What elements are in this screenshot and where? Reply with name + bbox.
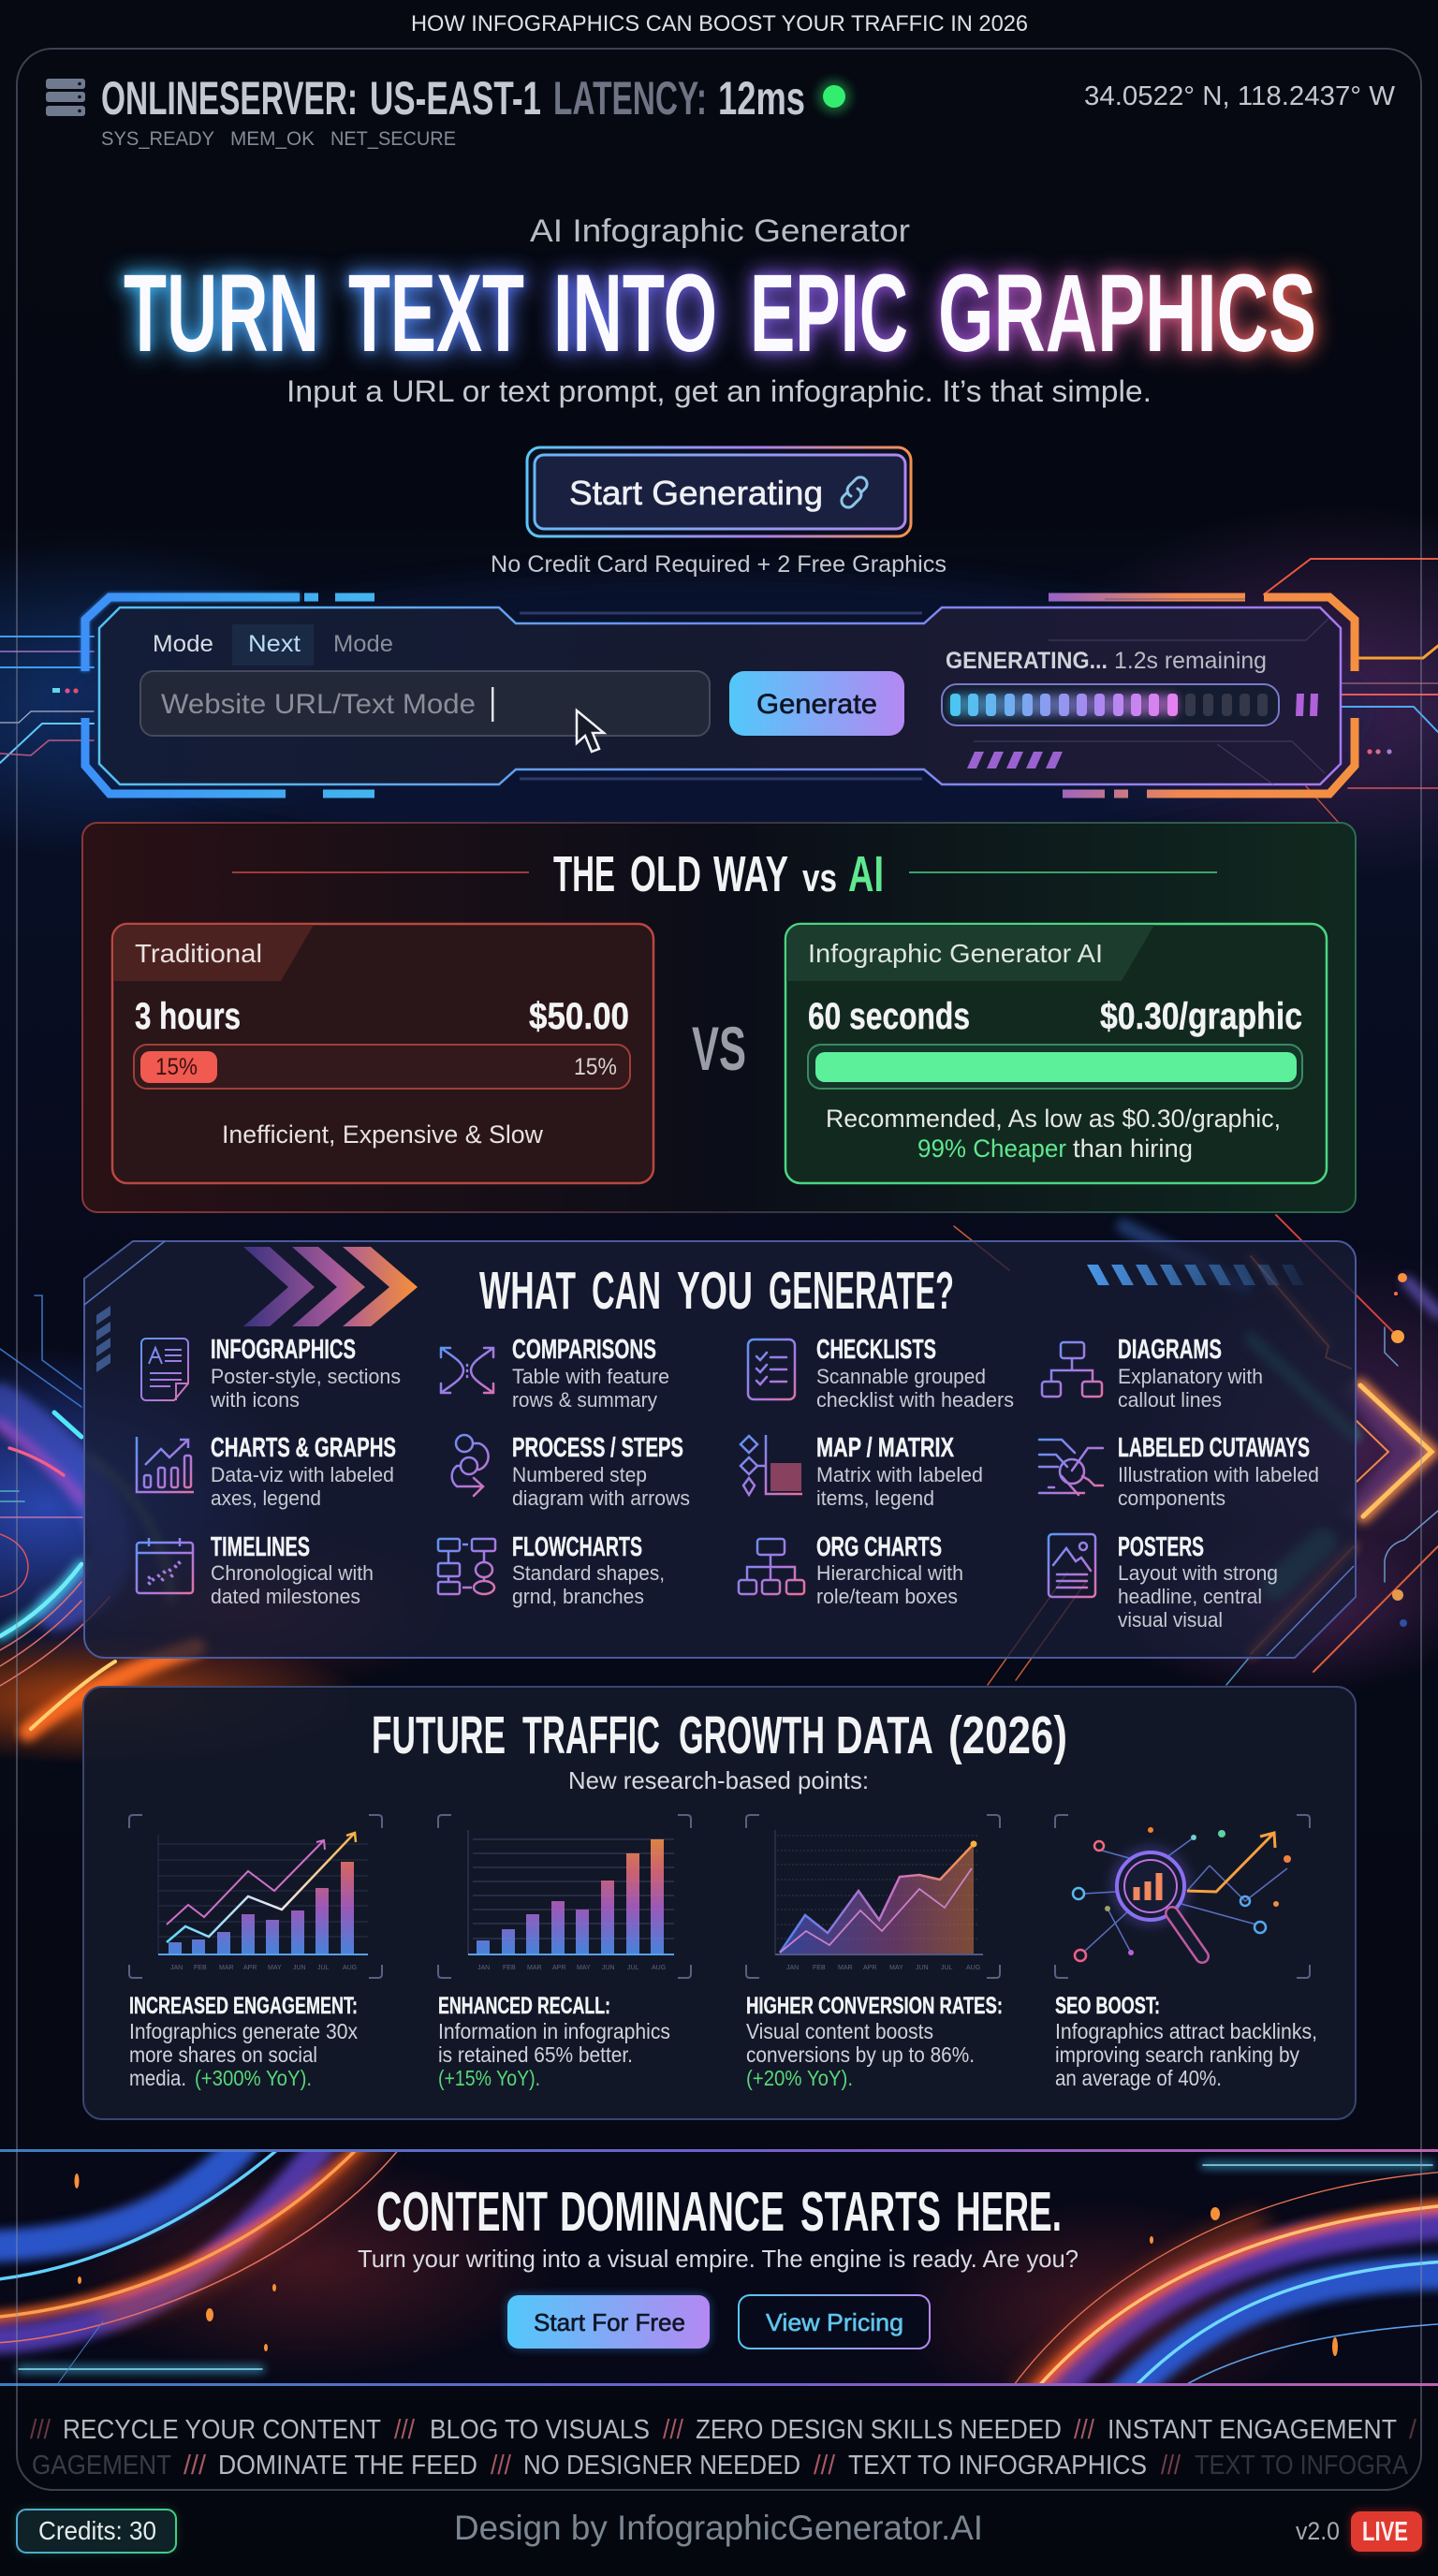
item: checklists <box>748 1335 1014 1412</box>
chart: enhanced recall: AUG <box>652 1965 666 1971</box>
item: flowcharts: grnd, branches <box>512 1585 644 1608</box>
heading <box>372 1705 1067 1765</box>
CTA heading <box>376 2181 1062 2243</box>
item: posters: headline, central <box>1118 1585 1262 1608</box>
chart: enhanced recall: FEB <box>503 1965 516 1971</box>
icon: mouse cursor <box>577 710 604 752</box>
text: SEO boost: Infographics attract backlinks, <box>1055 2019 1317 2043</box>
item: comparisons: COMPARISONS <box>512 1335 656 1365</box>
status bar <box>46 72 1396 150</box>
item: comparisons: Table with feature <box>512 1365 669 1388</box>
headline: TURN <box>124 252 319 375</box>
item: map matrix: MAP / MATRIX <box>816 1433 954 1463</box>
card: traditional: 15% <box>155 1054 198 1080</box>
heading: TRAFFIC <box>522 1705 660 1765</box>
ticker line two: TEXT TO INFOGRAPHICS <box>848 2451 1147 2481</box>
chart: enhanced recall: MAR <box>527 1965 542 1971</box>
text: higher conversion rates: Visual content boosts <box>746 2019 933 2043</box>
text: enhanced recall: is retained 65% better. <box>438 2042 633 2067</box>
item: flowcharts: FLOWCHARTS <box>512 1532 642 1562</box>
button: view pricing: View Pricing <box>766 2308 903 2336</box>
item: flowcharts: Standard shapes, <box>512 1561 665 1585</box>
ticker line two: /// <box>183 2451 207 2481</box>
decorative chevrons <box>243 1247 418 1326</box>
mode tabs: Mode <box>153 631 213 657</box>
latency text: 12ms <box>718 72 805 124</box>
ticker line one <box>30 2415 1417 2445</box>
latency text: LATENCY: <box>553 72 707 124</box>
item: map matrix <box>741 1433 983 1510</box>
chart: increased engagement: JAN <box>170 1965 183 1971</box>
text: enhanced recall: ENHANCED RECALL: <box>438 1993 610 2019</box>
card: AI generator: Infographic Generator AI <box>808 939 1103 968</box>
status light <box>817 80 851 113</box>
item: diagrams: callout lines <box>1118 1388 1222 1412</box>
system flags: MEM_OK <box>230 128 315 150</box>
headline glow: EPIC <box>750 252 908 375</box>
icon: chain link <box>842 477 867 507</box>
progress status: GENERATING... <box>946 648 1108 674</box>
item: diagrams: Explanatory with <box>1118 1365 1263 1388</box>
card: traditional: 15% <box>574 1054 617 1080</box>
chart: higher conversion rates: MAR <box>838 1965 853 1971</box>
CTA heading: DOMINANCE <box>560 2181 785 2243</box>
subheadline: Input a URL or text prompt, get an infographic. It’s that simple. <box>286 374 1152 408</box>
ticker line two: /// <box>814 2451 836 2481</box>
chart: increased engagement <box>129 1815 382 1978</box>
item: map matrix: Matrix with labeled <box>816 1463 983 1486</box>
heading: AI <box>848 846 884 902</box>
footer <box>17 2509 1422 2553</box>
generate button <box>729 671 904 736</box>
heading: THE <box>553 846 615 902</box>
system flags: NET_SECURE <box>330 128 456 150</box>
ticker line one: /// <box>1074 2415 1095 2445</box>
chart: increased engagement: JUN <box>293 1965 306 1971</box>
item: org charts: role/team boxes <box>816 1585 958 1608</box>
button: view pricing <box>739 2295 930 2349</box>
text: increased engagement: (+300% YoY). <box>195 2066 312 2090</box>
design credit: Design by InfographicGenerator.AI <box>454 2509 983 2547</box>
call to action <box>358 2181 1078 2349</box>
ticker line one: ZERO DESIGN SKILLS NEEDED <box>696 2415 1062 2445</box>
ticker line two: DOMINATE THE FEED <box>218 2451 477 2481</box>
item: labeled cutaways: components <box>1118 1486 1225 1510</box>
no credit card note: No Credit Card Required + 2 Free Graphics <box>491 551 946 578</box>
item: process steps: PROCESS / STEPS <box>512 1433 683 1463</box>
card: traditional <box>112 924 653 1183</box>
heading: GENERATE? <box>769 1261 954 1321</box>
hero <box>124 213 1316 578</box>
chart: enhanced recall: JUN <box>602 1965 615 1971</box>
subheading: New research-based points: <box>568 1766 869 1794</box>
chart: higher conversion rates: JAN <box>786 1965 799 1971</box>
mode tabs: Next <box>248 631 301 657</box>
headline inner glow <box>124 252 1316 375</box>
item: posters: POSTERS <box>1118 1532 1204 1562</box>
item: labeled cutaways: LABELED CUTAWAYS <box>1118 1433 1310 1463</box>
decorative stripes <box>1087 1265 1304 1285</box>
generate button: Generate <box>756 689 877 720</box>
item: infographics: INFOGRAPHICS <box>211 1335 356 1365</box>
coordinates: 34.0522° N, 118.2437° W <box>1084 81 1396 111</box>
chart: enhanced recall: JUL <box>627 1965 639 1971</box>
item: charts and graphs: Data-viz with labeled <box>211 1463 394 1486</box>
heading <box>232 846 1217 902</box>
top banner title: HOW INFOGRAPHICS CAN BOOST YOUR TRAFFIC IN 2026 <box>411 11 1028 37</box>
ticker line two: GAGEMENT <box>32 2451 171 2481</box>
start generating button: Start Generating <box>569 474 823 512</box>
chart: increased engagement: FEB <box>194 1965 207 1971</box>
headline: EPIC <box>750 252 908 375</box>
HUD outer bracket <box>85 597 1355 794</box>
chart: increased engagement: AUG <box>343 1965 357 1971</box>
url input <box>140 671 710 736</box>
card: traditional: 3 hours <box>135 996 241 1037</box>
system flags <box>101 128 456 150</box>
progress status <box>946 648 1267 674</box>
chart: higher conversion rates: APR <box>863 1965 876 1971</box>
text: SEO boost: an average of 40%. <box>1055 2066 1222 2090</box>
card: traditional: Traditional <box>135 939 262 968</box>
heading: (2026) <box>948 1705 1067 1765</box>
text: SEO boost: SEO BOOST: <box>1055 1993 1160 2019</box>
chart: enhanced recall <box>438 1815 691 1978</box>
item: timelines: Chronological with <box>211 1561 374 1585</box>
CTA heading: STARTS <box>800 2181 941 2243</box>
credits badge <box>17 2510 176 2553</box>
item: process steps <box>452 1433 690 1510</box>
text: increased engagement <box>129 1993 358 2090</box>
progress bar <box>942 684 1279 725</box>
text: enhanced recall: (+15% YoY). <box>438 2066 540 2090</box>
chart: increased engagement: JUL <box>317 1965 330 1971</box>
text: higher conversion rates: conversions by up to 86%. <box>746 2042 975 2067</box>
server status text: ONLINESERVER: <box>101 72 358 124</box>
ticker line two: NO DESIGNER NEEDED <box>523 2451 800 2481</box>
item: charts and graphs <box>137 1433 396 1510</box>
headline glow: INTO <box>553 252 717 375</box>
system flags: SYS_READY <box>101 128 214 150</box>
url input: Website URL/Text Mode <box>161 689 476 720</box>
chart: enhanced recall: JAN <box>477 1965 490 1971</box>
heading: CAN <box>592 1261 661 1321</box>
heading: WAY <box>713 846 788 902</box>
item: process steps: Numbered step <box>512 1463 647 1486</box>
item: org charts: Hierarchical with <box>816 1561 963 1585</box>
chart: higher conversion rates: JUL <box>941 1965 953 1971</box>
ticker line two: /// <box>491 2451 512 2481</box>
item: timelines <box>137 1532 374 1608</box>
chart: enhanced recall: APR <box>552 1965 565 1971</box>
headline <box>124 252 1316 375</box>
text: increased engagement: Infographics generate 30x <box>129 2019 358 2043</box>
chart: higher conversion rates: MAY <box>889 1965 903 1971</box>
panel: future traffic growth data <box>83 1687 1356 2119</box>
server status text: US-EAST-1 <box>370 72 541 124</box>
chart: higher conversion rates: JUN <box>916 1965 929 1971</box>
heading: vs <box>802 856 837 900</box>
CTA subheading: Turn your writing into a visual empire. The engine is ready. Are you? <box>358 2245 1078 2273</box>
heading: FUTURE <box>372 1705 506 1765</box>
headline inner glow: INTO <box>553 252 717 375</box>
item: infographics: Poster-style, sections <box>211 1365 401 1388</box>
decorative stripes <box>967 694 1318 768</box>
card: AI generator: than hiring <box>1073 1134 1193 1163</box>
button: start for free: Start For Free <box>534 2308 685 2336</box>
item: map matrix: items, legend <box>816 1486 934 1510</box>
item: timelines: dated milestones <box>211 1585 360 1608</box>
text: higher conversion rates <box>746 1993 1003 2090</box>
text: enhanced recall <box>438 1993 670 2090</box>
card: AI generator: $0.30/graphic <box>1100 996 1302 1037</box>
item: charts and graphs: CHARTS & GRAPHS <box>211 1433 396 1463</box>
icon: SEO magnifier network <box>1055 1815 1310 1978</box>
headline inner glow: TEXT <box>348 252 524 375</box>
item: labeled cutaways <box>1039 1433 1319 1510</box>
heading: OLD <box>630 846 701 902</box>
card: traditional: $50.00 <box>529 996 629 1037</box>
background art: neon streaks and glows <box>0 505 1438 1764</box>
panel: old way vs AI <box>82 823 1356 1212</box>
heading: GROWTH <box>679 1705 825 1765</box>
chart: increased engagement: APR <box>243 1965 257 1971</box>
chart: increased engagement: MAY <box>268 1965 282 1971</box>
ticker line one: INSTANT ENGAGEMENT <box>1108 2415 1397 2445</box>
ticker line one: /// <box>663 2415 684 2445</box>
icon: server stack <box>46 79 85 116</box>
item: timelines: TIMELINES <box>211 1532 310 1562</box>
VS label: VS <box>692 1014 746 1083</box>
chart: enhanced recall: MAY <box>577 1965 591 1971</box>
ticker line two: TEXT TO INFOGRA <box>1195 2451 1409 2481</box>
CTA heading: HERE. <box>956 2181 1062 2243</box>
headline: INTO <box>553 252 717 375</box>
item: posters: Layout with strong <box>1118 1561 1278 1585</box>
item: org charts: ORG CHARTS <box>816 1532 942 1562</box>
card: AI generator <box>785 924 1327 1183</box>
item: org charts <box>739 1532 963 1608</box>
headline glow <box>124 252 1316 375</box>
heading: DATA <box>836 1705 933 1765</box>
ticker line two <box>32 2451 1409 2481</box>
heading: WHAT <box>479 1261 576 1321</box>
text: enhanced recall: Information in infographics <box>438 2019 670 2043</box>
side ticks <box>96 1306 110 1372</box>
mode tabs <box>153 624 393 666</box>
item: comparisons <box>441 1335 669 1412</box>
item: checklists: CHECKLISTS <box>816 1335 936 1365</box>
headline inner glow: TURN <box>124 252 319 375</box>
live badge: LIVE <box>1362 2517 1408 2547</box>
heading <box>479 1261 954 1321</box>
text: increased engagement: INCREASED ENGAGEMENT: <box>129 1993 358 2019</box>
ticker line one: / <box>1409 2415 1417 2445</box>
headline inner glow: EPIC <box>750 252 908 375</box>
live badge <box>1351 2511 1422 2552</box>
headline: TEXT <box>348 252 524 375</box>
panel: what can you generate <box>84 1241 1356 1658</box>
ticker line one: RECYCLE YOUR CONTENT <box>63 2415 381 2445</box>
text: higher conversion rates: HIGHER CONVERSION RATES: <box>746 1993 1003 2019</box>
HUD inner panel <box>99 607 1341 784</box>
heading: YOU <box>677 1261 753 1321</box>
card: traditional: Inefficient, Expensive & Slow <box>222 1120 543 1149</box>
start generating button <box>527 447 911 536</box>
headline glow: TEXT <box>348 252 524 375</box>
headline glow: TURN <box>124 252 319 375</box>
item: flowcharts <box>438 1532 665 1608</box>
item: infographics <box>141 1335 401 1412</box>
text: higher conversion rates: (+20% YoY). <box>746 2066 853 2090</box>
ticker line one: BLOG TO VISUALS <box>430 2415 650 2445</box>
chart: increased engagement: MAR <box>219 1965 234 1971</box>
panel: generator HUD <box>85 597 1355 794</box>
ticker line two: /// <box>1161 2451 1181 2481</box>
chart: higher conversion rates: AUG <box>966 1965 980 1971</box>
card: AI generator: Recommended, As low as $0.30/graphic, <box>826 1105 1281 1133</box>
text: SEO boost: improving search ranking by <box>1055 2042 1299 2067</box>
item: checklists: checklist with headers <box>816 1388 1014 1412</box>
card: AI generator: 60 seconds <box>808 996 970 1037</box>
button: start for free <box>507 2295 710 2349</box>
text: increased engagement: more shares on social <box>129 2042 317 2067</box>
CTA heading: CONTENT <box>376 2181 548 2243</box>
progress status: 1.2s remaining <box>1114 648 1267 674</box>
item: process steps: diagram with arrows <box>512 1486 690 1510</box>
ticker line one: /// <box>30 2415 51 2445</box>
version: v2.0 <box>1296 2517 1340 2545</box>
card: AI generator: 99% Cheaper <box>917 1134 1066 1163</box>
item: diagrams: DIAGRAMS <box>1118 1335 1222 1365</box>
text: SEO boost <box>1055 1993 1317 2090</box>
credits badge: Credits: 30 <box>38 2516 156 2545</box>
mode tabs: Mode <box>333 631 393 657</box>
chart: higher conversion rates <box>746 1815 1000 1978</box>
chart: higher conversion rates: FEB <box>813 1965 826 1971</box>
item: comparisons: rows & summary <box>512 1388 657 1412</box>
item: labeled cutaways: Illustration with labeled <box>1118 1463 1319 1486</box>
item: infographics: with icons <box>210 1388 300 1412</box>
eyebrow: AI Infographic Generator <box>530 213 910 249</box>
item: posters: visual visual <box>1118 1608 1223 1632</box>
item: diagrams <box>1042 1335 1263 1412</box>
CTA background art <box>0 2144 1438 2424</box>
item: charts and graphs: axes, legend <box>211 1486 321 1510</box>
ticker line one: /// <box>394 2415 416 2445</box>
item: posters <box>1049 1532 1278 1632</box>
item: checklists: Scannable grouped <box>816 1365 986 1388</box>
text: increased engagement: media. <box>129 2066 186 2090</box>
